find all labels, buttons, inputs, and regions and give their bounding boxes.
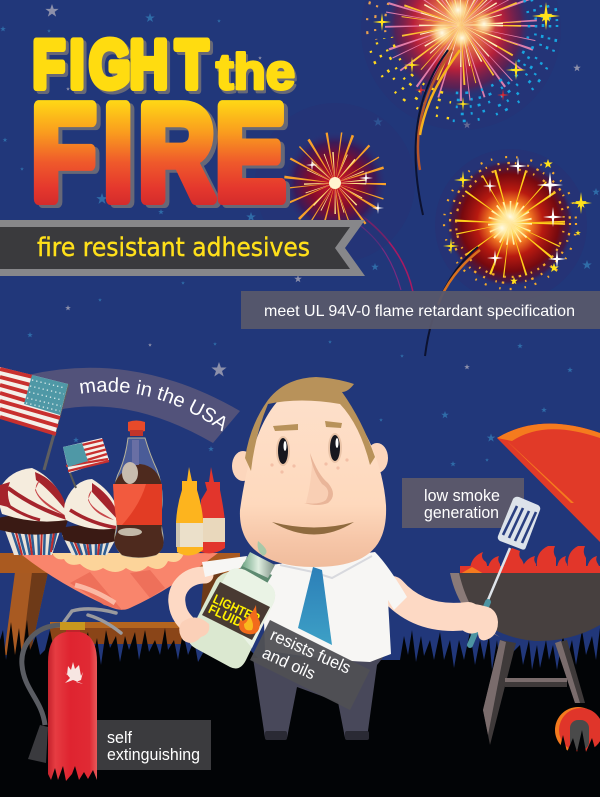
extinguisher handle — [64, 609, 121, 633]
man — [177, 377, 468, 740]
shoes — [265, 731, 369, 740]
cupcake right — [60, 479, 120, 555]
cupcake left — [0, 468, 68, 555]
lighter fluid bottle — [188, 541, 275, 668]
grill bowl — [450, 573, 600, 641]
left sleeve — [202, 556, 247, 577]
head — [240, 388, 386, 567]
freckles — [270, 458, 349, 474]
fire extinguisher — [22, 609, 121, 783]
trousers — [253, 655, 385, 738]
eyes — [276, 433, 342, 466]
callout: flame retardant specification: meet UL 94V-0 flame retardant specification — [264, 303, 575, 320]
grill lid — [497, 424, 600, 542]
nose — [304, 453, 333, 505]
grass over extinguisher — [48, 766, 97, 783]
callout: flame retardant specification — [241, 291, 600, 329]
firework trail: top — [416, 50, 460, 215]
left hand — [179, 617, 209, 643]
ketchup bottle — [201, 467, 225, 553]
bottle label text: LIGHTER — [211, 591, 263, 626]
firework trail: centre — [345, 205, 413, 292]
tie — [298, 567, 332, 645]
firework: centre — [255, 103, 415, 263]
subtitle banner — [0, 220, 365, 276]
stars — [0, 4, 600, 466]
grill — [450, 424, 600, 753]
callout: low smoke generation: low smoke — [424, 486, 500, 505]
extinguisher body — [48, 632, 97, 782]
title line 1: FIGHT — [33, 26, 208, 102]
large US flag — [0, 367, 68, 470]
tablecloth — [22, 553, 218, 610]
callout: self extinguishing — [97, 720, 211, 770]
hair — [245, 377, 375, 471]
title line 2: FIRE — [32, 76, 286, 228]
callout: resists fuels and oils: and oils — [259, 643, 318, 683]
mouth — [272, 522, 354, 534]
callout: resists fuels and oils — [250, 620, 370, 710]
subtitle text: fire resistant adhesives — [37, 233, 310, 263]
callout ribbon: made in the USA: made in the USA — [80, 377, 226, 432]
title — [32, 26, 297, 231]
callout ribbon: made in the USA — [31, 368, 240, 443]
soda bottle — [113, 420, 164, 558]
mustard bottle — [176, 467, 203, 556]
left arm — [177, 575, 205, 628]
callout: resists fuels and oils: resists fuels — [267, 625, 354, 678]
callout: low smoke generation — [402, 478, 524, 528]
callout: low smoke generation: generation — [424, 503, 499, 522]
bottle label — [202, 582, 270, 640]
firework: top — [361, 0, 561, 130]
shirt — [262, 552, 407, 662]
title shadow: the — [218, 47, 297, 103]
right hand — [462, 604, 498, 640]
table — [0, 553, 240, 655]
callout: self extinguishing: extinguishing — [107, 745, 200, 764]
firework trail: lower right — [425, 247, 480, 356]
flame icon — [239, 605, 260, 634]
grass over grill wheel — [552, 730, 600, 797]
firework: lower right — [435, 149, 592, 301]
grass — [0, 620, 600, 797]
small US flag — [63, 438, 109, 488]
ears — [232, 443, 388, 481]
bottle label text: FLUID — [206, 601, 245, 630]
spatula — [470, 497, 540, 645]
right arm — [392, 590, 468, 617]
extinguisher valve — [60, 622, 85, 630]
callout: self extinguishing: self — [107, 728, 132, 747]
title shadow: FIRE — [36, 79, 290, 231]
extinguisher hose — [22, 625, 62, 725]
title shadow: FIGHT — [36, 29, 211, 105]
extinguisher emblem — [65, 662, 83, 684]
eyebrows — [273, 421, 342, 431]
grill legs — [483, 640, 516, 745]
title word: the: the — [216, 44, 295, 100]
grill wheel — [555, 707, 600, 753]
extinguisher nozzle — [28, 725, 48, 763]
grill flames — [460, 546, 600, 574]
